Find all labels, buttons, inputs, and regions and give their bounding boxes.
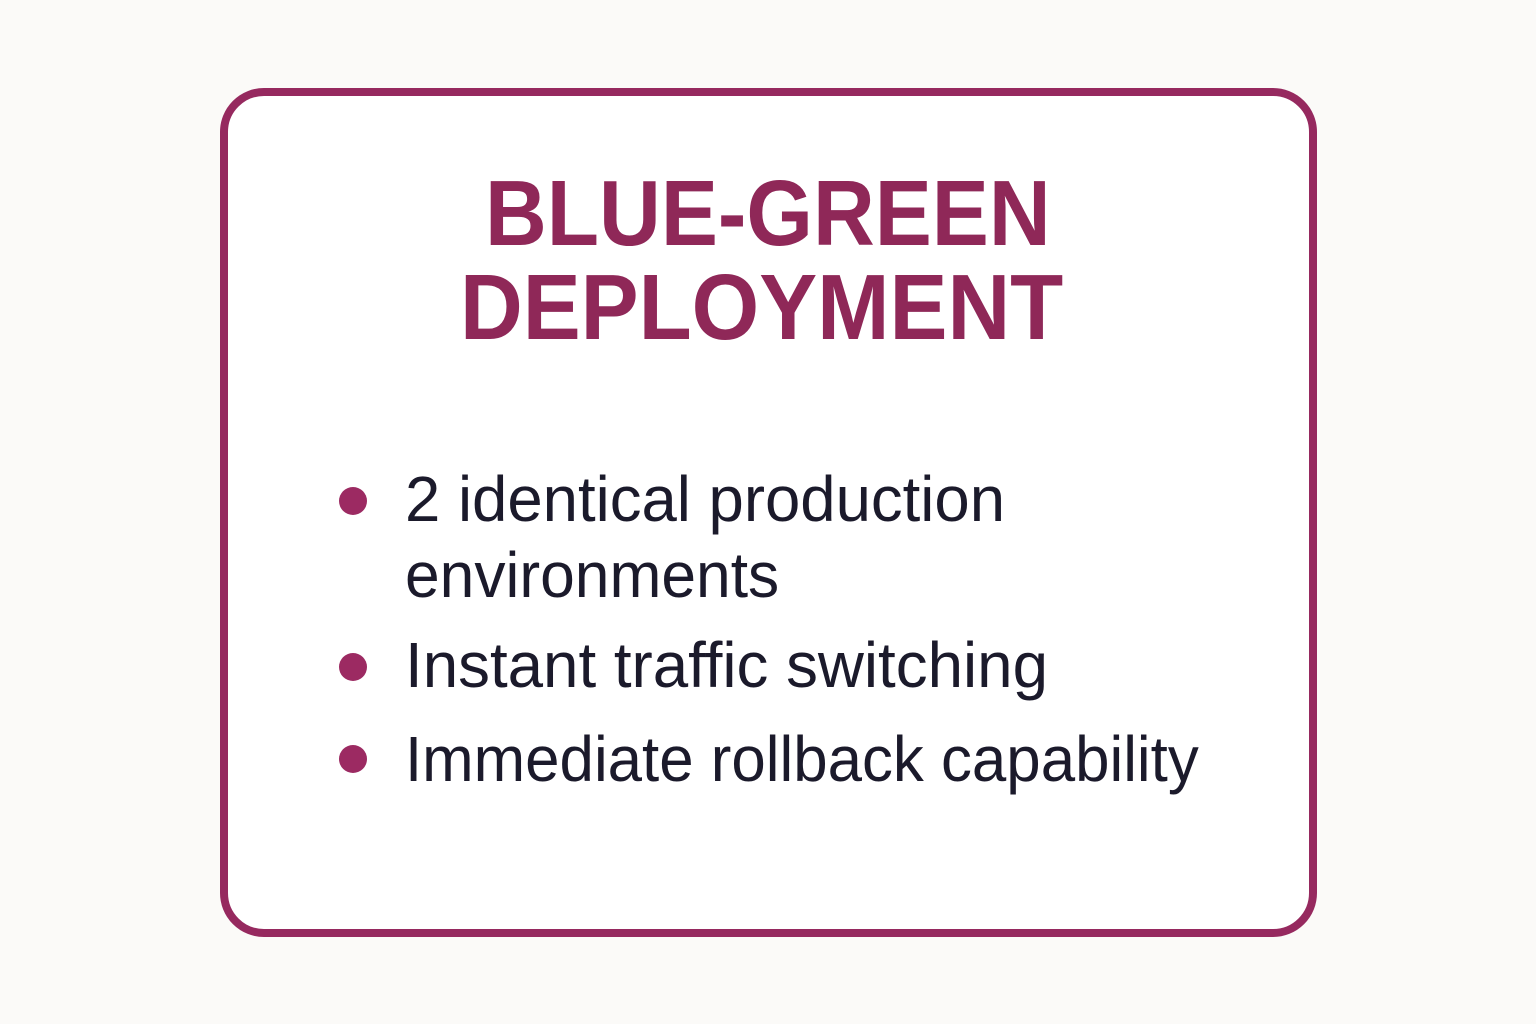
title: DEPLOYMENT: [460, 255, 1063, 359]
list item: identical environments: [339, 463, 1005, 611]
title: [460, 161, 1063, 359]
bullet list: [339, 463, 1199, 795]
list item: identical environments: environments: [405, 539, 779, 611]
title: BLUE-GREEN: [485, 161, 1051, 265]
list item: rollback: Immediate rollback capability: [405, 723, 1199, 795]
list item: traffic switching: Instant traffic switching: [405, 629, 1048, 701]
panel: card: [220, 88, 1317, 937]
list item: identical environments: 2 identical production: [405, 463, 1005, 535]
